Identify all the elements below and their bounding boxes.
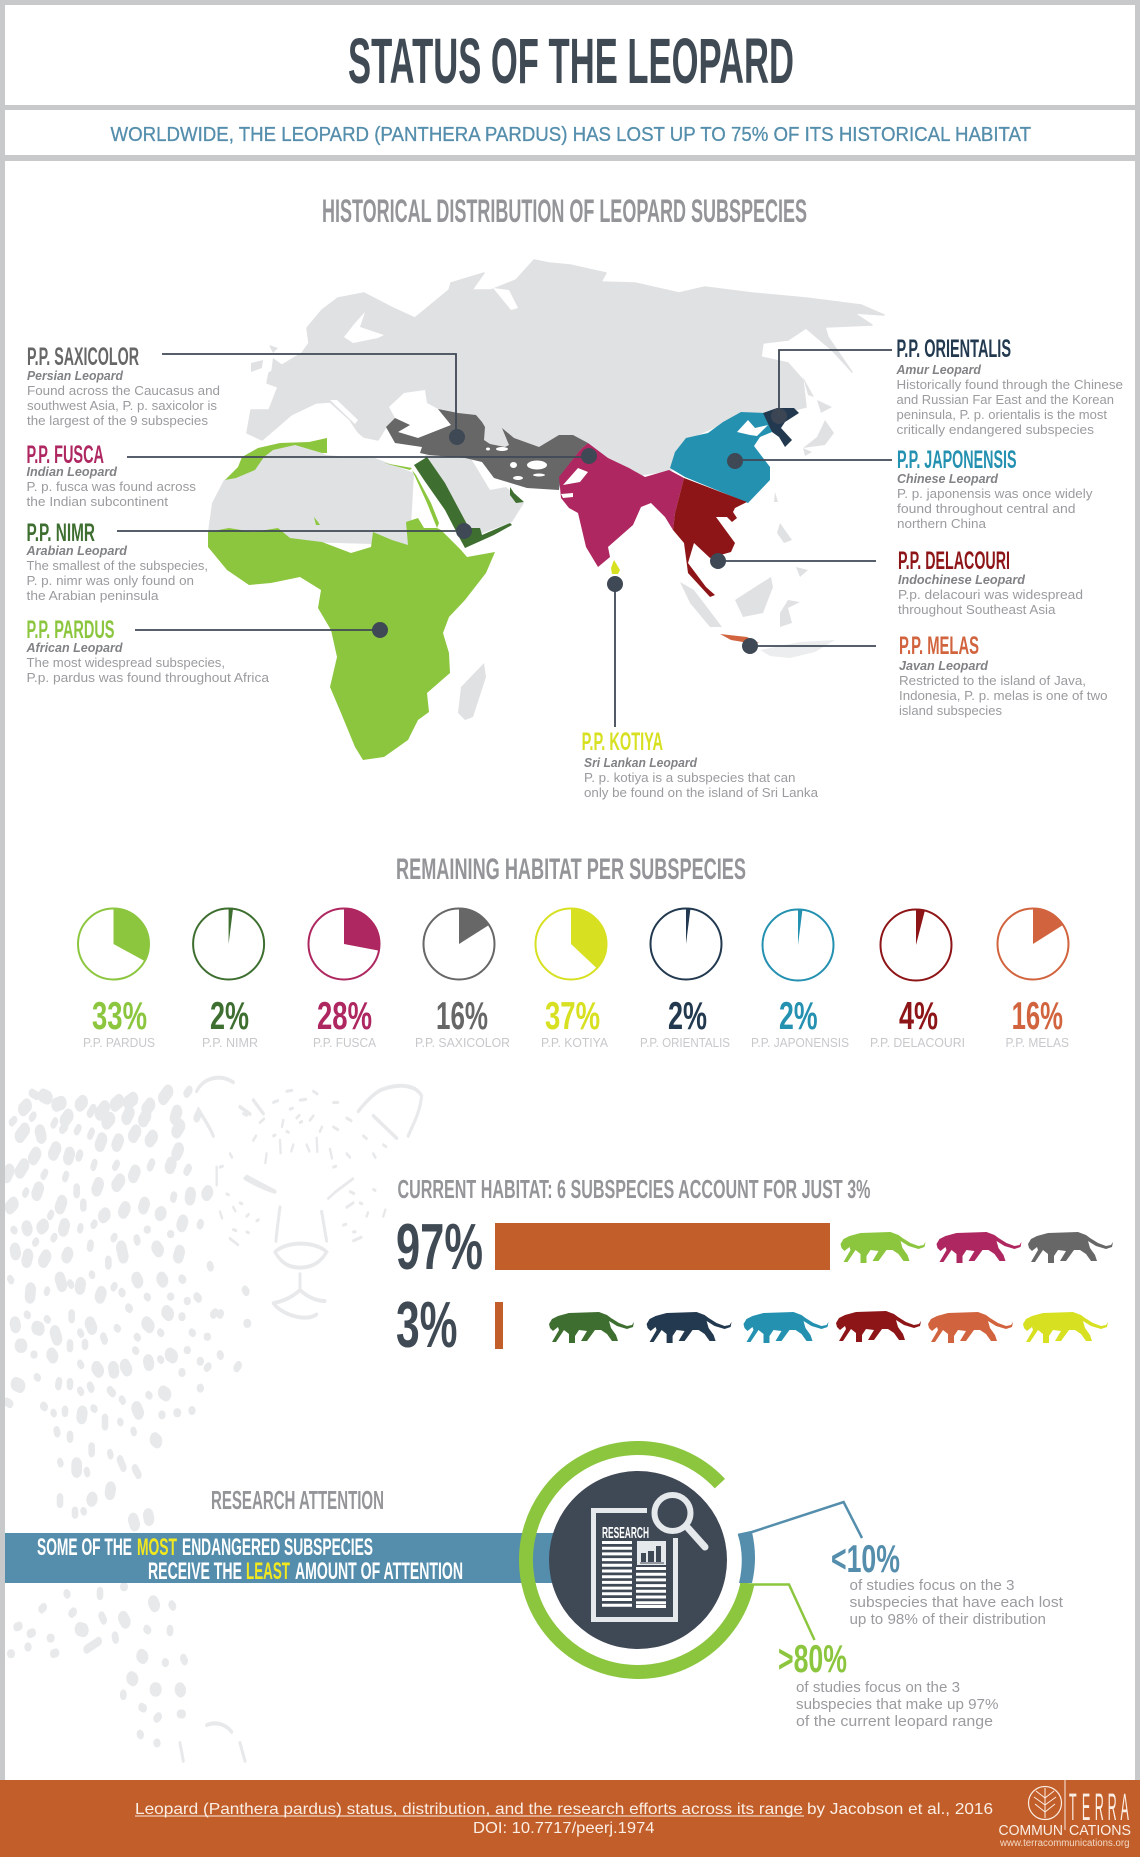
callout: P.p. japonensis: northern China: [897, 516, 987, 531]
pie: P.P. Japonensis 2%: 2%: [779, 995, 818, 1038]
stat: over 80%: of the current leopard range: [796, 1713, 993, 1730]
range: P.p. kotiya: [611, 560, 620, 574]
land: Arabian peninsula: [425, 455, 524, 548]
callout: P.p. fusca: [26, 441, 597, 509]
pie: P.P. Nimr 2%: [193, 908, 264, 1050]
callout: P.p. nimr: the Arabian peninsula: [26, 588, 159, 603]
stat: under 10%: of studies focus on the 3: [850, 1577, 1014, 1594]
world map of subspecies distribution: [208, 260, 884, 760]
callout: P.p. delacouri: [710, 547, 1083, 617]
stat: under 10%: up to 98% of their distribution: [850, 1611, 1046, 1628]
bar row: 3%: 3%: [396, 1288, 458, 1361]
pie: P.P. Pardus 33%: 33%: [92, 995, 147, 1038]
logo: Terra Communications: TERRA: [1069, 1785, 1129, 1828]
range: P.p. orientalis: [763, 408, 799, 447]
pie: P.P. Melas 16%: 16%: [1012, 995, 1063, 1038]
heading: current habitat: CURRENT HABITAT: 6 SUBSPECIES ACCOUNT FOR JUST 3%: [398, 1174, 870, 1204]
callout: P.p. kotiya: Sri Lankan Leopard: [584, 756, 697, 770]
pie: P.P. Nimr 2%: P.P. NIMR: [202, 1035, 258, 1050]
citation: Leopard (Panthera pardus) status, distribution, and the research efforts across its range: [135, 1801, 803, 1818]
range: P.p. pardus: [208, 438, 495, 760]
callout: P.p. delacouri: Indochinese Leopard: [898, 573, 1025, 587]
callout: P.p. saxicolor: P.P. SAXICOLOR: [27, 343, 139, 371]
pie: P.P. Orientalis 2%: [640, 908, 730, 1050]
citation: DOI: 10.7717/peerj.1974: [473, 1820, 655, 1837]
callout: P.p. nimr: [25, 519, 472, 603]
land: Eurasia: [247, 260, 884, 475]
stat: over 80%: subspecies that make up 97%: [796, 1696, 998, 1713]
range: P.p. saxicolor: [386, 409, 588, 490]
heading: research attention: RESEARCH ATTENTION: [211, 1485, 384, 1515]
pie: P.P. Saxicolor 16%: 16%: [436, 995, 488, 1038]
callout: P.p. kotiya: P.P. KOTIYA: [582, 728, 663, 756]
callout: P.p. melas: P.P. MELAS: [899, 632, 979, 660]
pie: P.P. Japonensis 2%: [751, 909, 849, 1050]
range: P.p. melas: [720, 634, 759, 643]
callout: P.p. saxicolor: Persian Leopard: [27, 369, 123, 383]
callout: P.p. melas: Javan Leopard: [899, 659, 988, 673]
banner: most endangered, least attention: MOST: [137, 1534, 177, 1561]
callout: P.p. japonensis: [727, 446, 1093, 531]
callout: P.p. pardus: P.p. pardus was found throughout Africa: [26, 670, 270, 685]
callout: P.p. orientalis: peninsula, P. p. orientalis is the most: [896, 407, 1107, 422]
callout: P.p. nimr: The smallest of the subspecies,: [26, 558, 208, 573]
pie: P.P. Kotiya 37%: P.P. KOTIYA: [541, 1035, 608, 1050]
subtitle: WORLDWIDE, THE LEOPARD (PANTHERA PARDUS) HAS LOST UP TO 75% OF ITS HISTORICAL HABITAT: [110, 124, 1031, 146]
range: P.p. delacouri: [673, 478, 747, 597]
stat: over 80%: of studies focus on the 3: [796, 1679, 960, 1696]
callout: P.p. delacouri: throughout Southeast Asia: [898, 602, 1056, 617]
callout: P.p. melas: island subspecies: [899, 703, 1002, 718]
pie: P.P. Saxicolor 16%: [415, 908, 510, 1050]
pie: P.P. Pardus 33%: [78, 908, 155, 1050]
callout: P.p. japonensis: P.P. JAPONENSIS: [897, 446, 1016, 474]
callout: P.p. orientalis: [771, 335, 1123, 437]
land: islands: [251, 345, 834, 720]
callout: P.p. japonensis: Chinese Leopard: [897, 472, 998, 486]
pie: P.P. Saxicolor 16%: P.P. SAXICOLOR: [415, 1035, 510, 1050]
citation: by Jacobson et al., 2016: [807, 1801, 993, 1818]
callout: P.p. fusca: Indian Leopard: [26, 465, 117, 479]
callout: P.p. pardus: African Leopard: [25, 641, 123, 655]
stat: over 80%: >80%: [778, 1638, 847, 1681]
arc and leader: under 10%: [738, 1502, 862, 1583]
callout: P.p. nimr: P.P. NIMR: [26, 519, 95, 547]
pie: P.P. Delacouri 4%: [870, 909, 965, 1050]
callout: P.p. saxicolor: Found across the Caucasus and: [27, 383, 220, 398]
callout: P.p. pardus: The most widespread subspecies,: [26, 655, 225, 670]
leader: over 80%: [740, 1584, 814, 1640]
callout: P.p. saxicolor: southwest Asia, P. p. saxicolor is: [27, 398, 217, 413]
pie: P.P. Orientalis 2%: 2%: [668, 995, 707, 1038]
callout: P.p. orientalis: critically endangered subspecies: [896, 422, 1095, 437]
callout: P.p. orientalis: Amur Leopard: [896, 363, 981, 377]
pie: P.P. Delacouri 4%: 4%: [899, 995, 938, 1038]
background: faded leopard spot pattern: [7, 1078, 422, 1761]
pie: P.P. Orientalis 2%: P.P. ORIENTALIS: [640, 1035, 730, 1050]
stat: under 10%: [831, 1538, 1064, 1628]
bar row: 97%: [396, 1210, 1113, 1283]
callout: P.p. japonensis: P. p. japonensis was once widely: [897, 486, 1093, 501]
stat: under 10%: subspecies that have each lost: [850, 1594, 1064, 1611]
callout: P.p. fusca: the Indian subcontinent: [26, 494, 168, 509]
logo: Terra Communications: www.terracommunications.org: [999, 1838, 1130, 1849]
icon: research document in ring: [526, 1448, 748, 1672]
pie: P.P. Fusca 28%: 28%: [317, 995, 372, 1038]
callout: P.p. orientalis: and Russian Far East and the Korean: [896, 392, 1114, 407]
banner: most endangered, least attention: SOME OF THE: [37, 1534, 132, 1561]
callout: P.p. fusca: P.P. FUSCA: [26, 441, 104, 469]
pie: P.P. Fusca 28%: [308, 908, 380, 1050]
heading: remaining habitat: REMAINING HABITAT PER SUBSPECIES: [396, 853, 746, 886]
range: P.p. japonensis: [670, 412, 772, 503]
bar row: 3%: [396, 1288, 1108, 1361]
callout: P.p. orientalis: Historically found through the Chinese: [896, 377, 1123, 392]
footer band with citation and logo: [0, 1780, 1140, 1857]
pie: P.P. Melas 16%: P.P. MELAS: [1006, 1035, 1069, 1050]
callout: P.p. melas: [742, 632, 1108, 718]
callout: P.p. saxicolor: the largest of the 9 subspecies: [27, 413, 209, 428]
callout: P.p. kotiya: only be found on the island of Sri Lanka: [584, 785, 819, 800]
callout: P.p. nimr: P. p. nimr was only found on: [26, 573, 194, 588]
banner: most endangered, least attention: RECEIVE THE: [148, 1558, 242, 1585]
callout: P.p. saxicolor: [27, 343, 465, 445]
banner: most endangered, least attention: [5, 1533, 605, 1585]
banner: most endangered, least attention: ENDANGERED SUBSPECIES: [182, 1534, 373, 1561]
pie: P.P. Delacouri 4%: P.P. DELACOURI: [870, 1035, 965, 1050]
callout: P.p. orientalis: P.P. ORIENTALIS: [896, 335, 1011, 363]
pie: P.P. Nimr 2%: 2%: [210, 995, 249, 1038]
stat: under 10%: <10%: [831, 1538, 900, 1581]
logo: Terra Communications: CATIONS: [1069, 1822, 1131, 1839]
pie: P.P. Pardus 33%: P.P. PARDUS: [83, 1035, 155, 1050]
icon: research document in ring: RESEARCH: [602, 1525, 649, 1542]
pie charts: remaining habitat per subspecies: [78, 908, 1069, 1050]
callout: P.p. fusca: P. p. fusca was found across: [26, 479, 197, 494]
citation: [135, 1801, 993, 1837]
callout: P.p. delacouri: P.p. delacouri was widespread: [898, 587, 1083, 602]
callout: P.p. pardus: [25, 616, 388, 685]
callout: P.p. melas: Indonesia, P. p. melas is one of two: [899, 688, 1108, 703]
range: P.p. nimr: [414, 457, 524, 548]
callout: P.p. delacouri: P.P. DELACOURI: [898, 547, 1010, 575]
callout: P.p. nimr: Arabian Leopard: [25, 544, 127, 558]
pie: P.P. Japonensis 2%: P.P. JAPONENSIS: [751, 1035, 849, 1050]
logo: Terra Communications: [998, 1780, 1131, 1849]
pie: P.P. Melas 16%: [998, 908, 1069, 1050]
stat: over 80%: [778, 1638, 998, 1730]
bar row: 97%: 97%: [396, 1210, 483, 1283]
pie: P.P. Kotiya 37%: 37%: [545, 995, 600, 1038]
callout: P.p. kotiya: [582, 576, 819, 800]
callout: P.p. melas: Restricted to the island of Java,: [899, 673, 1086, 688]
range: P.p. fusca: [559, 443, 684, 567]
logo: Terra Communications: COMMUN: [998, 1822, 1063, 1839]
banner: most endangered, least attention: LEAST: [246, 1558, 290, 1585]
callout: P.p. japonensis: found throughout central and: [897, 501, 1076, 516]
seas cut out of the landmass: [316, 288, 518, 438]
pie: P.P. Fusca 28%: P.P. FUSCA: [313, 1035, 376, 1050]
callout: P.p. kotiya: P. p. kotiya is a subspecies that can: [584, 770, 796, 785]
pie: P.P. Kotiya 37%: [536, 908, 608, 1050]
callout: P.p. pardus: P.P. PARDUS: [26, 616, 114, 644]
banner: most endangered, least attention: AMOUNT OF ATTENTION: [295, 1558, 463, 1585]
land: North Africa: [208, 445, 414, 545]
